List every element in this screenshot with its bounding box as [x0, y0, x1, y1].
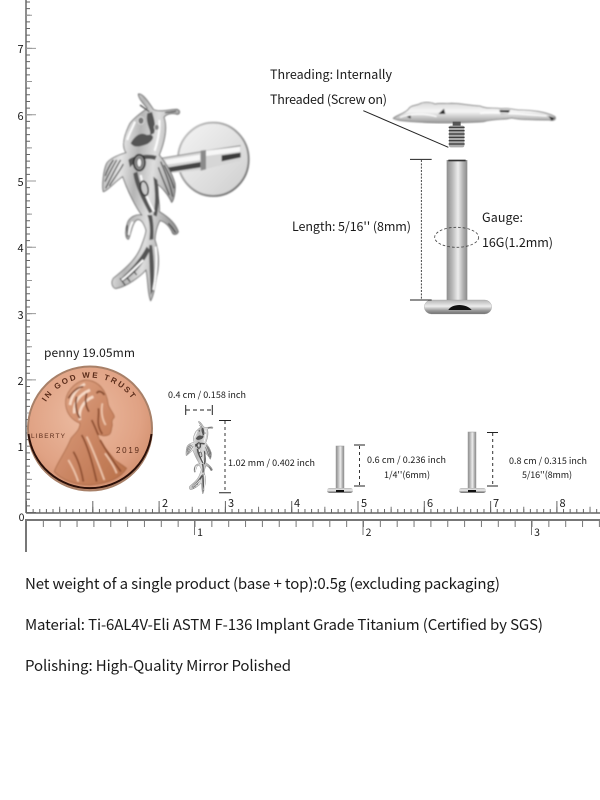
- horizontal inch ruler: 4: [294, 495, 300, 511]
- small scale fish charm: [186, 421, 213, 494]
- horizontal inch ruler: 8: [559, 495, 566, 511]
- vertical inch ruler: 3: [17, 307, 24, 323]
- horizontal inch ruler: 6: [427, 495, 433, 511]
- charm side profile: [393, 102, 555, 123]
- 6mm dimension: 1/4''(6mm): [384, 468, 430, 481]
- horizontal inch ruler: 5: [361, 495, 367, 511]
- product details text: Material: Ti-6AL4V-Eli ASTM F-136 Implant Grade Titanium (Certified by SGS): [25, 614, 543, 635]
- 6mm dimension: [354, 445, 446, 486]
- penny coin: 2019: [116, 446, 140, 455]
- penny coin: IN GOD WE TRUST: [42, 372, 136, 402]
- lower centimetre ruler: 1: [197, 525, 203, 540]
- horizontal inch ruler: 2: [162, 495, 168, 511]
- lower centimetre ruler: [26, 519, 600, 552]
- lower centimetre ruler: 3: [534, 525, 540, 540]
- stud shaft: [161, 146, 241, 174]
- penny coin: LIBERTY: [31, 433, 66, 440]
- width dimension for charm: [168, 388, 246, 415]
- side view parts: [363, 102, 555, 314]
- labret flat base: [424, 300, 492, 314]
- height dimension for charm: 1.02 mm / 0.402 inch: [228, 456, 315, 469]
- length dimension: [410, 159, 432, 300]
- fish charm: [103, 94, 180, 301]
- gauge label: [482, 207, 553, 251]
- lincoln bust: [54, 380, 127, 485]
- height dimension for charm: [219, 420, 315, 493]
- penny caption: penny 19.05mm: [44, 344, 135, 361]
- length label: Length: 5/16'' (8mm): [292, 216, 411, 235]
- product details text: Net weight of a single product (base + top):0.5g (excluding packaging): [25, 573, 500, 594]
- vertical inch ruler: 7: [17, 41, 24, 57]
- vertical inch ruler: 1: [17, 439, 24, 455]
- width dimension for charm: 0.4 cm / 0.158 inch: [168, 388, 246, 401]
- product details text: [25, 573, 543, 676]
- stud back disc: [178, 123, 249, 196]
- gauge label: 16G(1.2mm): [482, 232, 553, 251]
- zero label: 0: [19, 510, 25, 525]
- screw thread: [449, 122, 465, 147]
- gauge label: Gauge:: [482, 207, 523, 226]
- 8mm dimension: 5/16''(8mm): [522, 468, 572, 481]
- product details text: Polishing: High-Quality Mirror Polished: [25, 655, 291, 676]
- vertical inch ruler: 5: [17, 174, 24, 190]
- vertical inch ruler: 4: [17, 240, 24, 256]
- leader line to thread: [363, 111, 448, 147]
- horizontal inch ruler: 7: [493, 495, 499, 511]
- threading label: [270, 64, 392, 108]
- vertical inch ruler: [17, 0, 31, 513]
- 6mm dimension: 0.6 cm / 0.236 inch: [367, 453, 446, 466]
- small 6mm post: [327, 446, 353, 493]
- 8mm dimension: [487, 432, 587, 486]
- lower centimetre ruler: 2: [366, 525, 372, 540]
- 8mm dimension: 0.8 cm / 0.315 inch: [509, 454, 587, 467]
- horizontal inch ruler: [26, 495, 600, 513]
- threading label: Threading: Internally: [270, 64, 392, 83]
- labret post: [447, 160, 467, 302]
- penny coin: [27, 366, 153, 492]
- small 8mm post: [459, 432, 486, 493]
- threading label: Threaded (Screw on): [270, 89, 387, 108]
- vertical inch ruler: 6: [17, 108, 24, 124]
- vertical inch ruler: 2: [17, 373, 24, 389]
- gauge dashed ellipse: [435, 227, 479, 247]
- horizontal inch ruler: 3: [228, 495, 234, 511]
- main photo: fish barbell stud: [103, 94, 249, 301]
